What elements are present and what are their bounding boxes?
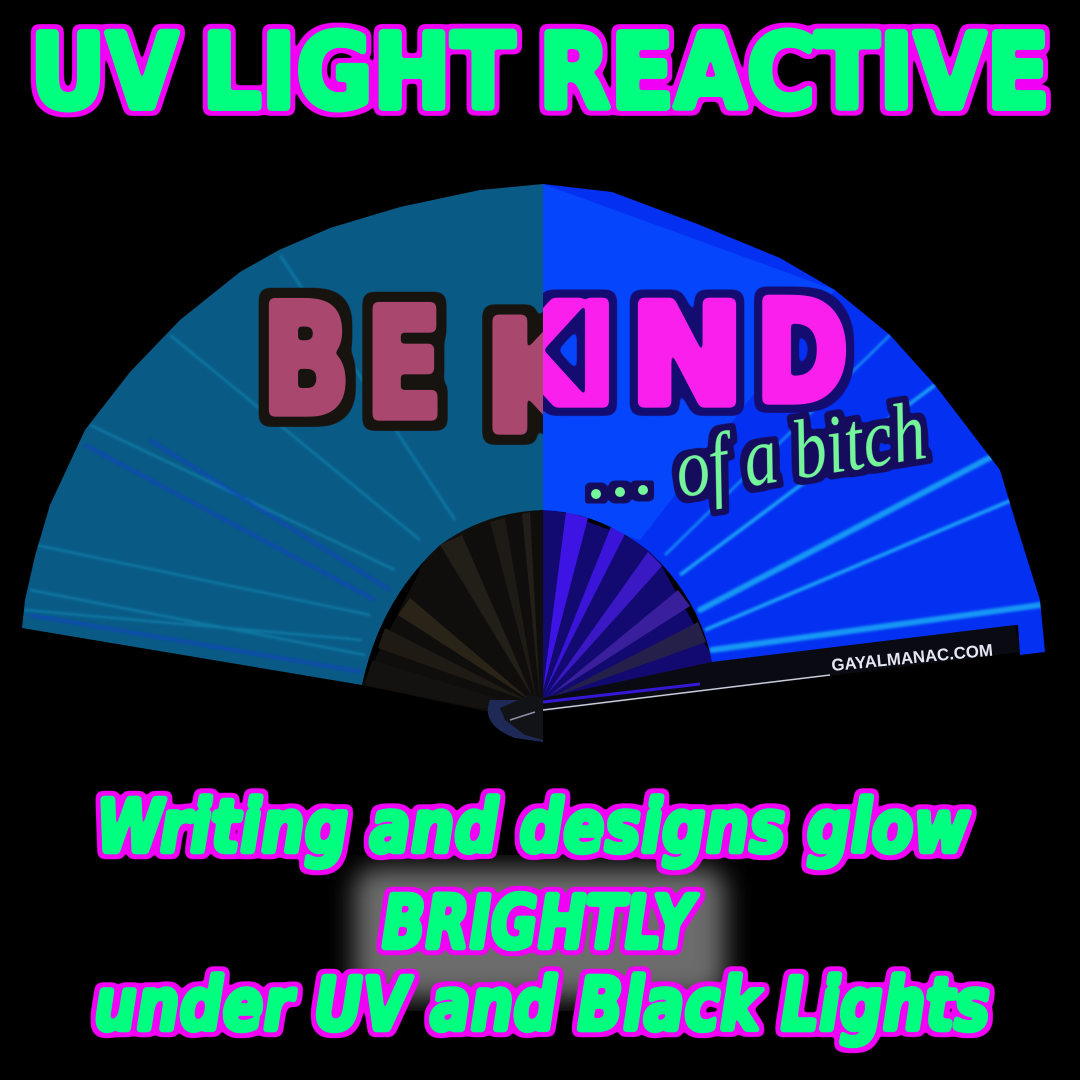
purple stick stripe <box>543 684 700 702</box>
left half under normal light <box>22 184 543 712</box>
of a bitch script: of a bitch <box>668 384 932 516</box>
KIND lettering: I <box>580 275 614 436</box>
glow behind BRIGHTLY <box>355 868 725 998</box>
BE K lettering, dimmed: B <box>262 274 350 448</box>
KIND lettering: D <box>756 272 848 433</box>
BE K lettering, dimmed: E <box>366 278 442 452</box>
BE K lettering, dimmed: K <box>484 289 597 466</box>
dots <box>591 485 648 499</box>
stick highlight <box>543 675 830 710</box>
right fan ribs <box>543 505 715 705</box>
hinge knob <box>488 695 543 742</box>
left fan ribs <box>362 500 543 715</box>
website label: GAYALMANAC.COM <box>831 641 994 675</box>
fan product photo <box>0 170 1053 742</box>
KIND lettering: K <box>486 275 587 436</box>
black stick <box>543 625 1020 712</box>
KIND lettering: N <box>630 275 744 436</box>
right half under UV light <box>543 184 1045 712</box>
right fan fabric <box>543 170 1053 670</box>
BE K lettering, dimmed <box>258 288 543 446</box>
KIND lettering <box>543 286 854 416</box>
left fan fabric <box>0 170 543 700</box>
caption line 2: BRIGHTLY <box>382 880 699 966</box>
